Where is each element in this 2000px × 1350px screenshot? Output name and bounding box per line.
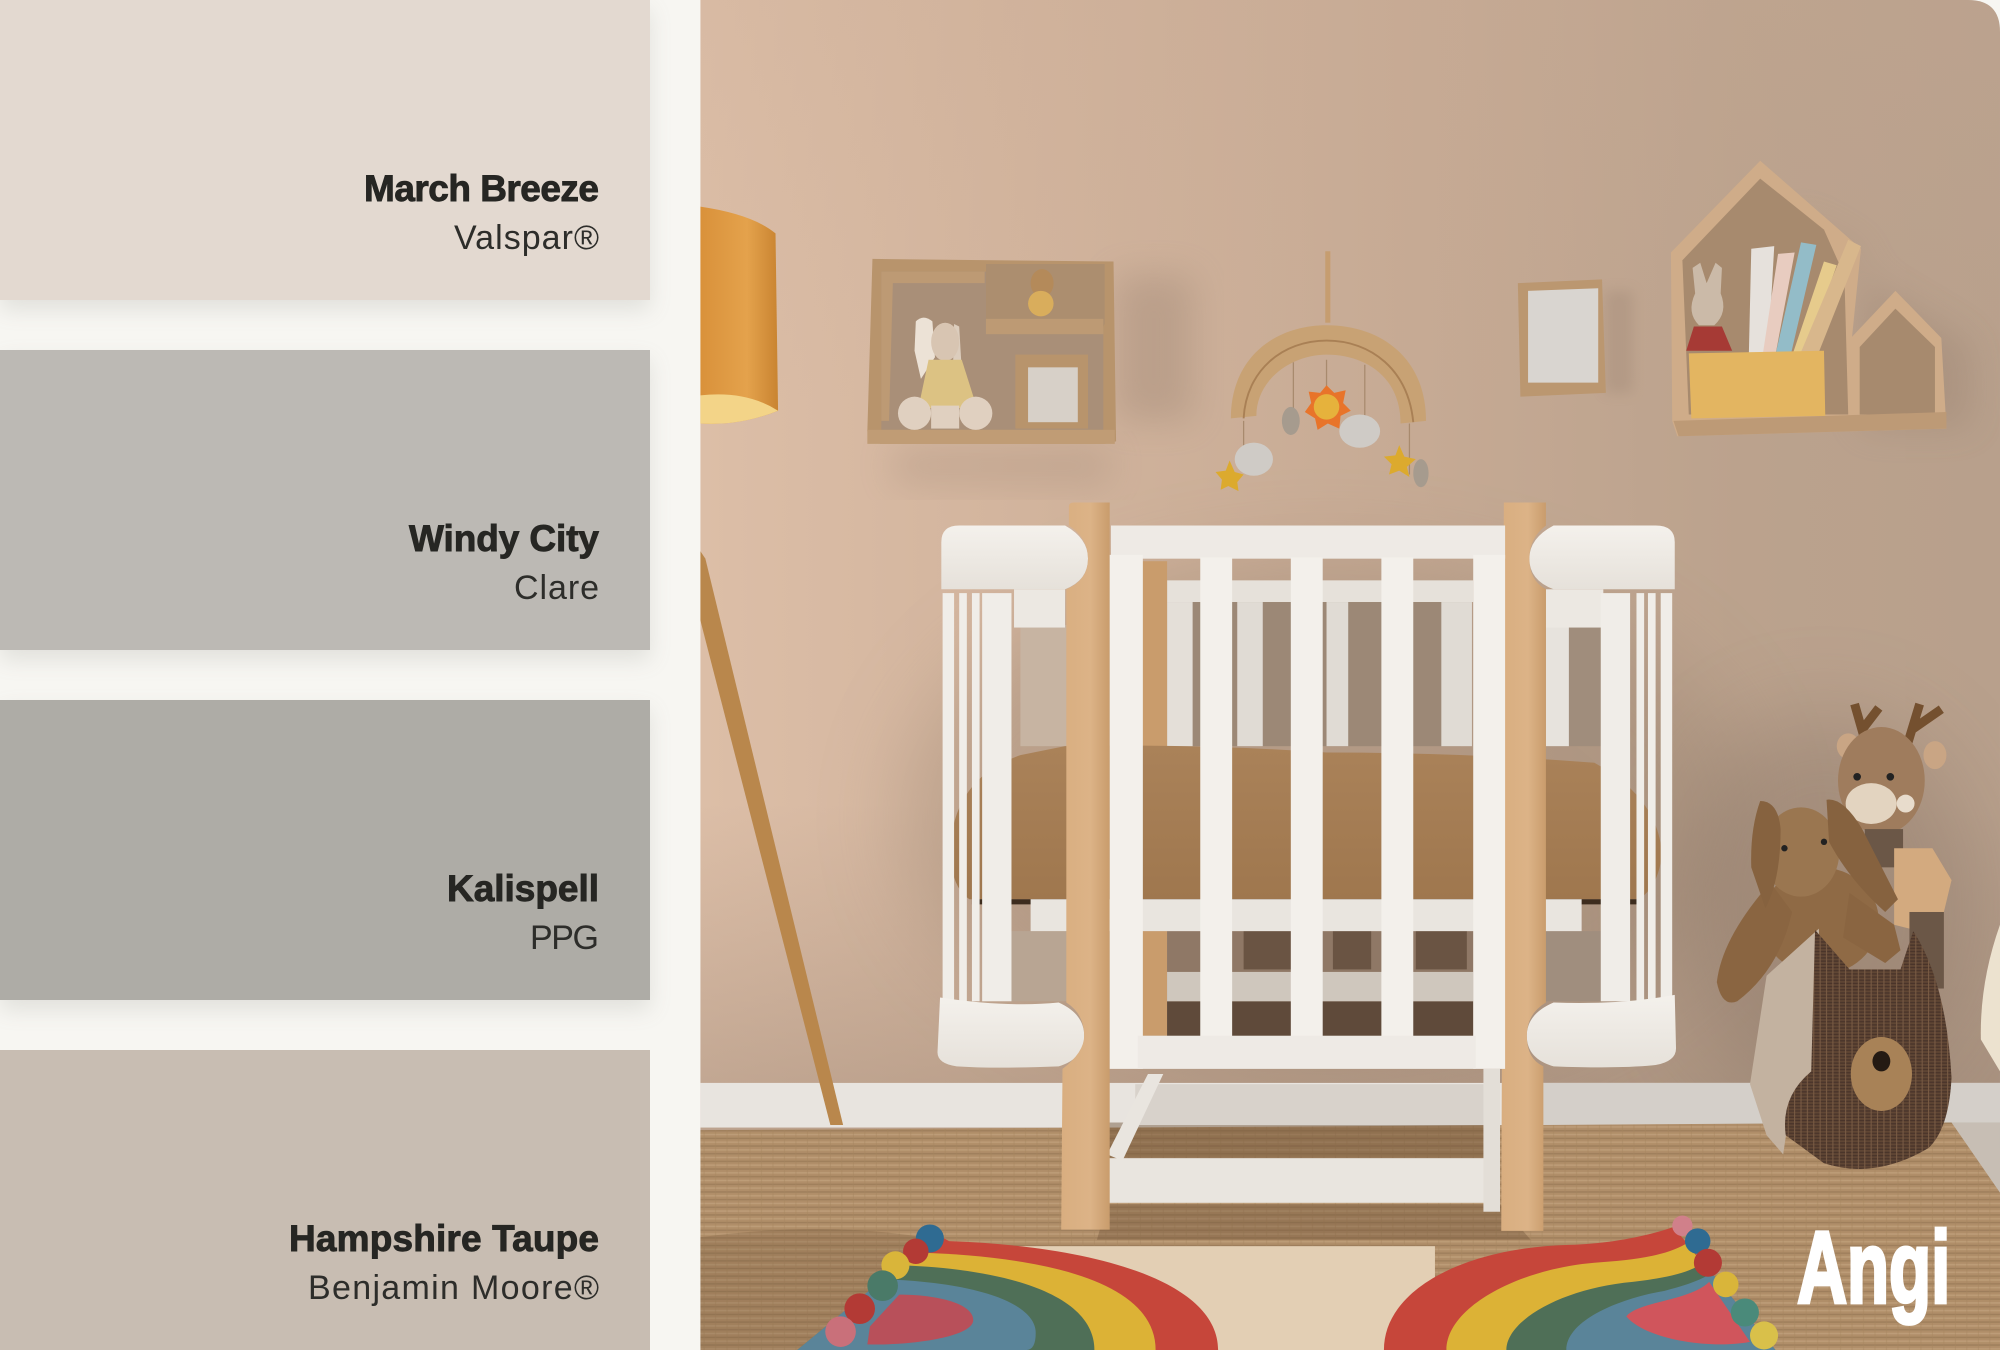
- baseboard: [700, 1083, 2000, 1128]
- rainbow: right: [1384, 1227, 1776, 1350]
- wall shelf with toys: [867, 259, 1193, 485]
- panel: nursery photo illustration: [700, 0, 2000, 1350]
- floor: [1952, 1122, 2000, 1192]
- wall: [700, 0, 2000, 1148]
- sun: [1305, 385, 1351, 430]
- swatch: Windy City: Windy City: [409, 518, 599, 559]
- swatch: Kalispell: [0, 700, 650, 1000]
- pom poms: [825, 1216, 1778, 1349]
- swatch: March Breeze: Valspar®: [454, 219, 599, 257]
- swatch: March Breeze: [0, 0, 650, 300]
- crib under-frame: [1107, 1069, 1500, 1212]
- swatch: March Breeze: March Breeze: [364, 168, 599, 209]
- panel: paint swatches: [0, 0, 650, 1350]
- hanging rainbow mobile: [1216, 251, 1429, 491]
- yellow box: [1689, 351, 1825, 418]
- crib rear rails and bars: [1011, 561, 1610, 1040]
- crib mid rail: [1031, 899, 1582, 931]
- swatch: Hampshire Taupe: Hampshire Taupe: [289, 1218, 599, 1259]
- plush toys and basket: [1717, 704, 1952, 1169]
- woven basket: [1785, 930, 1952, 1169]
- toy bunny large: [1717, 800, 1901, 1003]
- lamp leg: [700, 551, 843, 1125]
- empty picture frame: [1518, 279, 1633, 397]
- patterned rainbow rug: [797, 1216, 1778, 1350]
- toy bear: [1028, 269, 1054, 316]
- crib side bars: [943, 593, 1672, 1001]
- swatch: Windy City: Clare: [514, 569, 599, 607]
- crib front gate: [1110, 526, 1505, 1069]
- pale object at right edge: [1981, 925, 2000, 1071]
- lamp shade: [700, 207, 778, 424]
- scarf: [1750, 929, 1821, 1154]
- crib: [937, 503, 1676, 1231]
- swatch: Hampshire Taupe: Benjamin Moore®: [308, 1269, 599, 1307]
- swatch: Windy City: [0, 350, 650, 650]
- swatch: Hampshire Taupe: [0, 1050, 650, 1350]
- crib wooden posts: [1061, 503, 1546, 1231]
- swatch: Kalispell: PPG: [530, 919, 599, 957]
- crib side caps: [937, 526, 1676, 1068]
- toy bunny: [898, 318, 992, 430]
- picture frame small: [1015, 355, 1088, 429]
- rolled papers: [1749, 240, 1861, 360]
- toy deer: [1837, 704, 1952, 989]
- swatch: Kalispell: Kalispell: [447, 868, 599, 909]
- jute rug: [700, 1122, 2000, 1350]
- house-shaped wall shelf: [1671, 161, 1971, 436]
- rainbow: left: [797, 1235, 1218, 1350]
- mattress: [950, 746, 1662, 899]
- toy bunny on shelf: [1686, 263, 1732, 351]
